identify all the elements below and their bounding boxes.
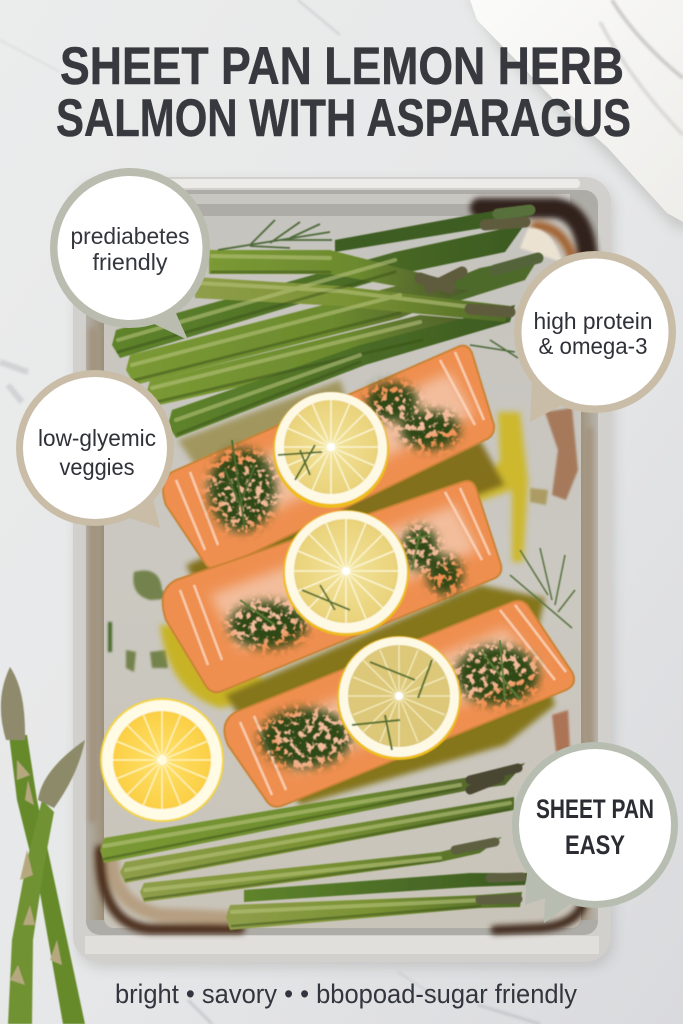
rosemary sprig top <box>218 220 332 250</box>
lemon half <box>100 698 224 822</box>
footer tagline: bright • savory • • bbopoad-sugar friendly <box>115 979 577 1009</box>
badge: low-glyemic veggies: low-glyemic <box>38 425 156 451</box>
herbs <box>228 526 463 649</box>
sheet pan <box>73 177 614 968</box>
lemon slice 3 <box>337 636 461 760</box>
salmon fillet 1 <box>163 346 494 569</box>
lemon slice 1 <box>273 392 389 508</box>
cream patch in burnt corner <box>520 228 562 262</box>
badge: prediabetes friendly <box>50 168 210 340</box>
salmon fillet 3 <box>224 601 574 807</box>
badge: high protein and omega-3 <box>514 251 676 422</box>
herbs <box>208 382 460 532</box>
rosemary sprig right <box>510 548 575 628</box>
title <box>56 37 631 148</box>
burnt corner stains <box>92 208 590 930</box>
badge: sheet pan easy: EASY <box>565 830 625 860</box>
badge: sheet pan easy <box>512 742 678 923</box>
bottom asparagus highlights and tips <box>104 768 522 926</box>
white linen towel <box>470 0 683 232</box>
asparagus highlights and tips <box>118 210 538 434</box>
asparagus bunch bottom <box>100 763 528 930</box>
asparagus bunch top <box>112 206 540 438</box>
badge: high protein and omega-3: & omega-3 <box>538 333 648 359</box>
lemon slice 2 <box>283 510 409 636</box>
rust speckles <box>108 408 578 752</box>
badge: low-glyemic veggies <box>16 370 174 528</box>
salmon fillet 2 <box>163 481 501 692</box>
herbs <box>259 645 539 768</box>
badge: prediabetes friendly: friendly <box>92 249 168 275</box>
badge: low-glyemic veggies: veggies <box>60 454 134 480</box>
badge: prediabetes friendly: prediabetes <box>70 223 190 249</box>
olive oil pools <box>160 380 555 805</box>
badge: high protein and omega-3: high protein <box>534 308 652 334</box>
asparagus stalks outside pan <box>1 667 85 1024</box>
